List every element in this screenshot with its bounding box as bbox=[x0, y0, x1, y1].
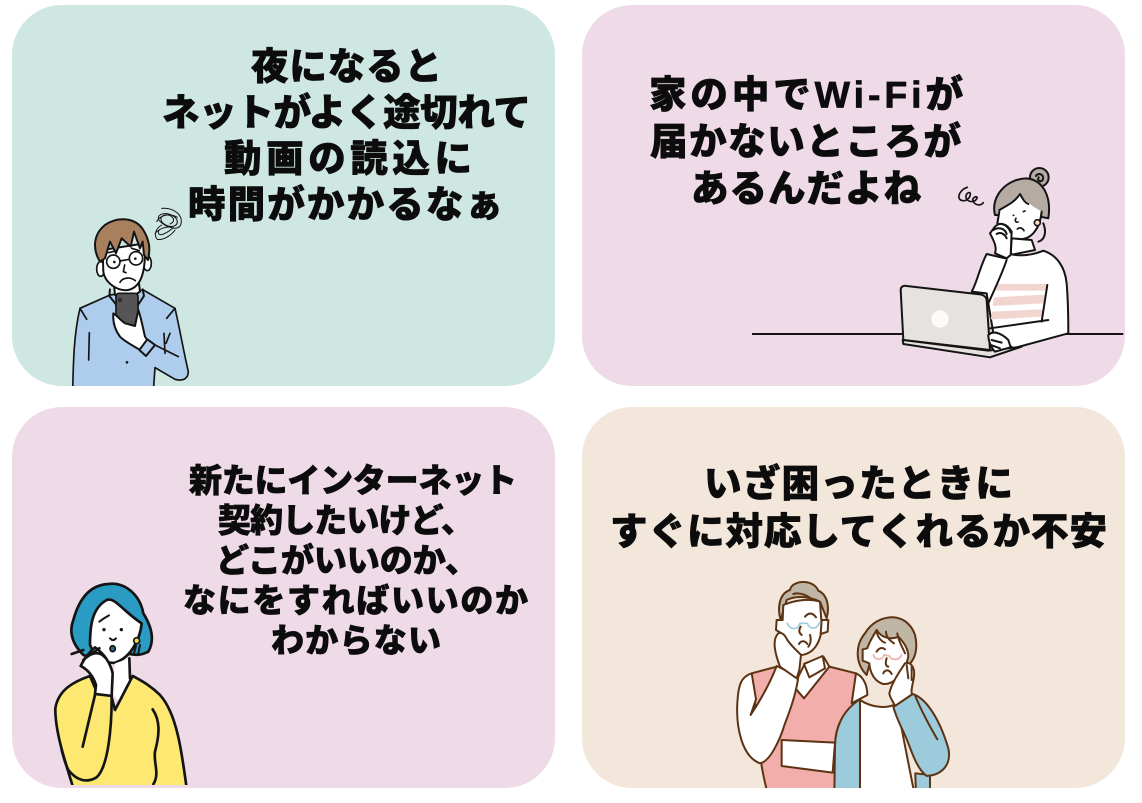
heading: panel 1 text bbox=[162, 46, 531, 226]
icon: worried elderly couple bbox=[737, 582, 949, 797]
icon: man looking at phone bbox=[73, 208, 188, 392]
heading: panel 4 text: いざ困ったときに bbox=[704, 462, 1013, 504]
heading: panel 4 text bbox=[610, 462, 1107, 552]
heading: panel 2 text: あるんだよね bbox=[691, 168, 922, 210]
heading: panel 1 text: 時間がかかるなぁ bbox=[188, 184, 503, 226]
heading: panel 1 text: ネットがよく途切れて bbox=[162, 92, 531, 134]
heading: panel 3 text: 契約したいけど、 bbox=[218, 502, 474, 539]
panel: slow night-time connection bbox=[12, 5, 555, 392]
heading: panel 1 text: 夜になると bbox=[251, 46, 442, 88]
heading: panel 3 text: わからない bbox=[271, 622, 441, 659]
heading: panel 3 text: なにをすればいいのか bbox=[183, 582, 528, 619]
panel: which provider to choose bbox=[12, 407, 555, 793]
icon: woman at laptop bbox=[752, 168, 1123, 357]
panel: worried about support bbox=[582, 407, 1125, 797]
heading: panel 1 text: 動画の読込に bbox=[224, 138, 472, 180]
icon: woman in yellow sweater bbox=[55, 584, 187, 793]
heading: panel 2 text: 届かないところが bbox=[650, 120, 962, 162]
heading: panel 2 text: 家の中でWi-Fiが bbox=[649, 74, 964, 116]
heading: panel 3 text: 新たにインターネット bbox=[189, 462, 517, 499]
heading: panel 3 text: どこがいいのか、 bbox=[216, 542, 478, 579]
heading: panel 4 text: すぐに対応してくれるか不安 bbox=[610, 510, 1107, 552]
panel: Wi-Fi does not reach bbox=[582, 5, 1125, 386]
heading: panel 2 text bbox=[649, 74, 964, 210]
heading: panel 3 text bbox=[183, 462, 528, 659]
